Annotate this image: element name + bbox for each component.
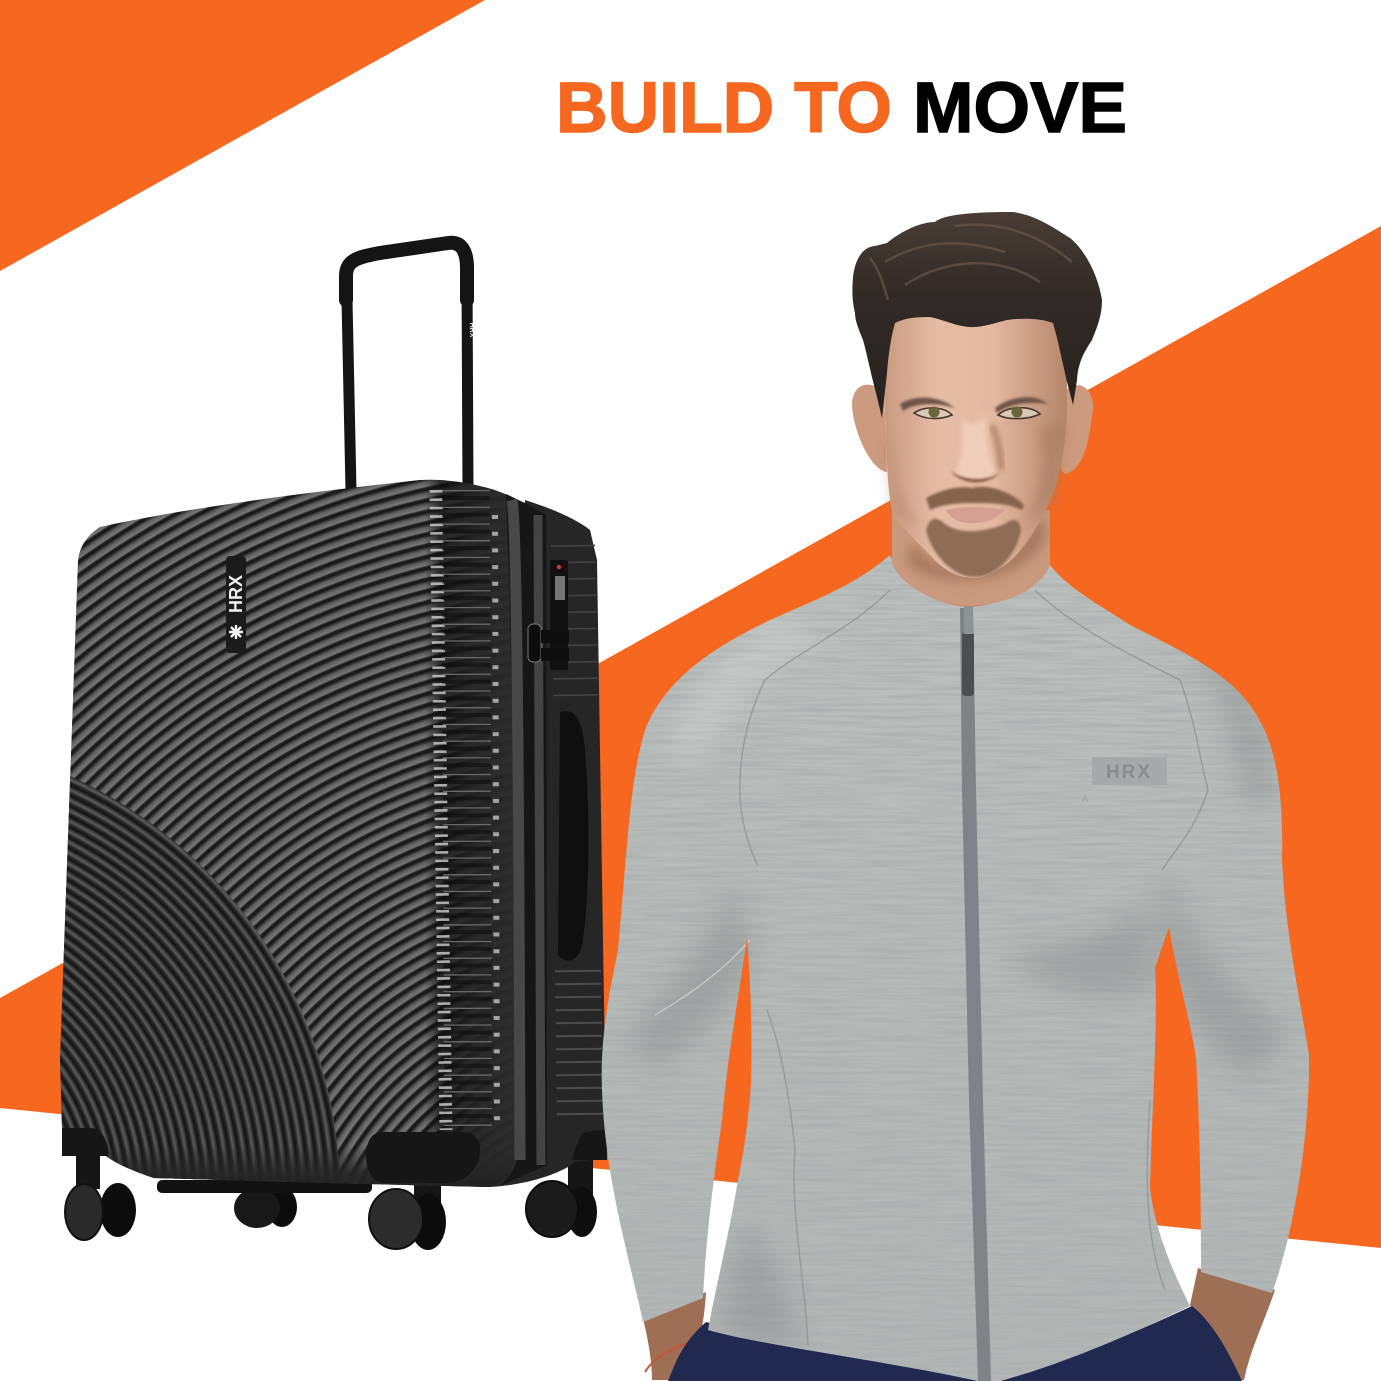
title: BUILD TO MOVE: BUILD TO (556, 69, 892, 148)
title: BUILD TO MOVE (556, 69, 1127, 148)
raglan seams (655, 590, 1208, 1345)
side panel ribs (573, 545, 580, 1125)
model wearing grey jacket (590, 212, 1320, 1381)
neck (892, 505, 1050, 606)
nose shading (955, 412, 996, 480)
muscle and fold shading (625, 610, 1290, 1350)
goatee (926, 519, 1021, 577)
chest HRX logo: A (1082, 794, 1094, 804)
eyes (914, 408, 952, 419)
title: BUILD TO MOVE: MOVE (913, 69, 1127, 148)
navy trousers (668, 1306, 1242, 1381)
red wrist thread (645, 1340, 697, 1372)
suitcase front shell upper ripple lines (40, 470, 530, 1200)
hair highlights (870, 225, 1072, 300)
face (884, 310, 1067, 578)
corner bumpers (62, 1128, 607, 1183)
telescopic trolley handle: HRX (468, 323, 475, 338)
zipper pull (962, 606, 974, 696)
wheels (65, 1155, 597, 1250)
chest HRX logo (1082, 757, 1167, 804)
eyebrows (900, 398, 955, 411)
neck shadow (908, 515, 1048, 581)
chest HRX logo: HRX (1106, 762, 1152, 783)
suitcase (40, 243, 607, 1250)
suitcase corner shading and ribs (40, 470, 530, 1200)
side carry handle (558, 711, 588, 961)
zipper seam (500, 494, 547, 1186)
background: diagonal orange band (0, 226, 1381, 1248)
ears (852, 385, 1093, 474)
HRX badge (226, 556, 246, 653)
lips (946, 507, 1004, 523)
HRX badge: HRX (226, 575, 246, 613)
cheek shading (1020, 420, 1066, 530)
combination lock (528, 560, 569, 670)
facial features (884, 397, 1066, 577)
background: top-left orange triangle (0, 0, 485, 271)
jacket (590, 540, 1320, 1381)
telescopic trolley handle (346, 243, 475, 490)
jacket zipper (960, 608, 991, 1381)
suitcase front shell lower arc section (56, 770, 340, 1200)
centre underside bar (157, 1180, 372, 1193)
suitcase side panel (489, 500, 607, 1187)
hands and wrists (643, 1268, 1275, 1380)
moustache (926, 487, 1024, 510)
hair (852, 212, 1102, 418)
